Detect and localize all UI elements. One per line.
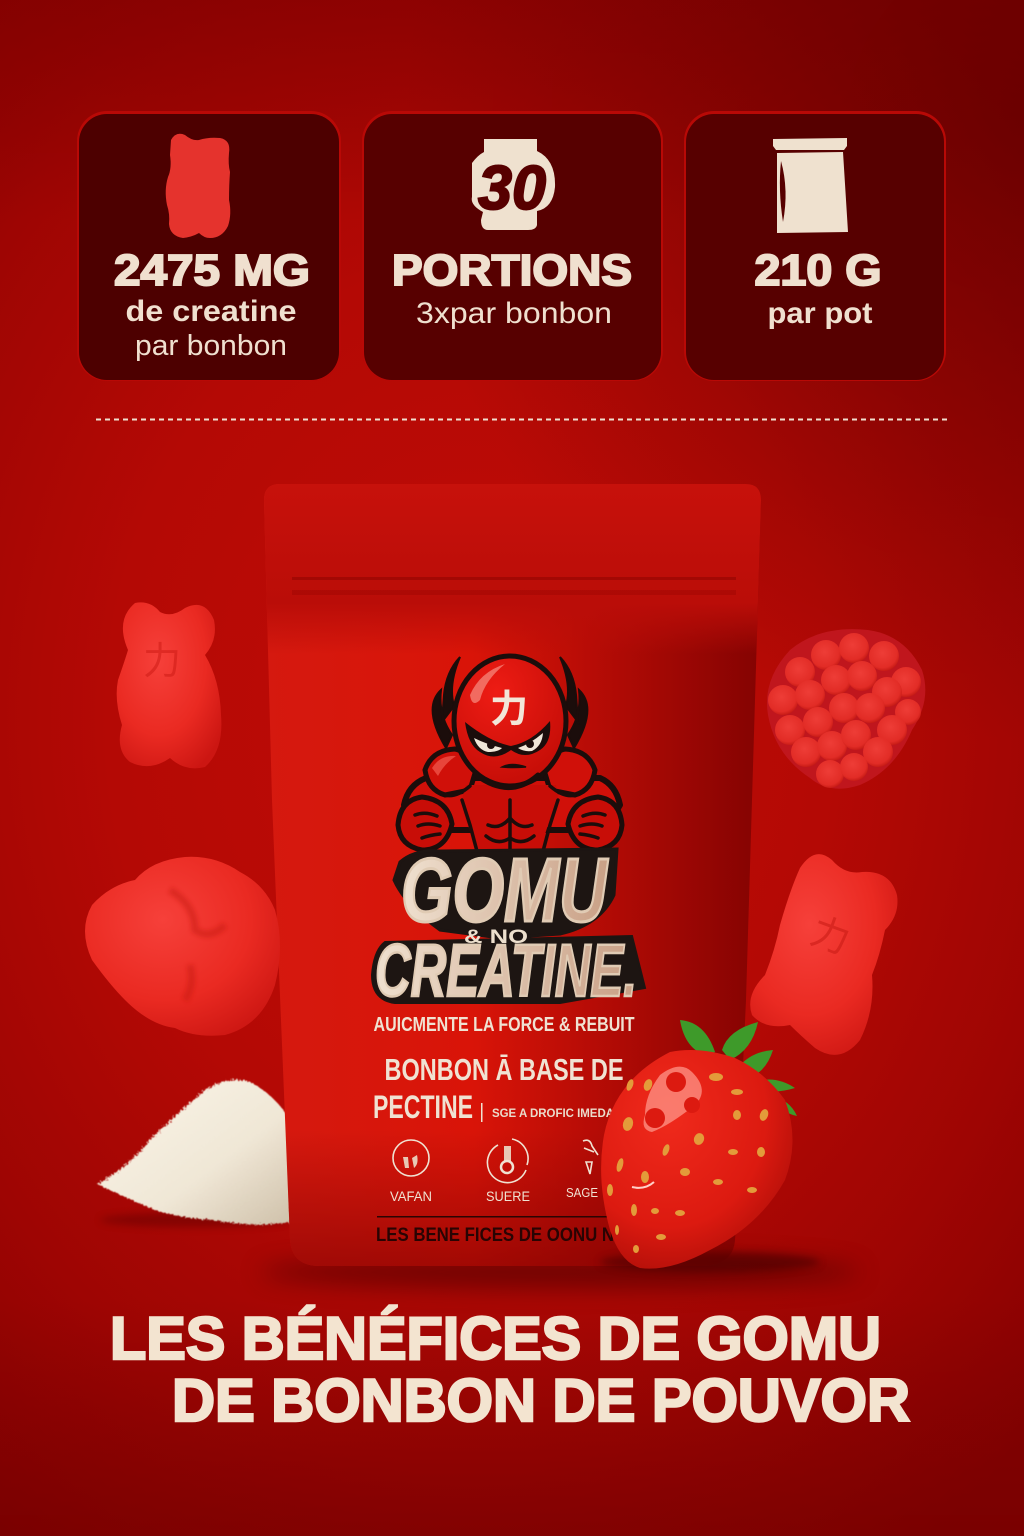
torso (462, 785, 558, 856)
panel: creatine dose (77, 111, 341, 381)
icon: jar with 30 (472, 139, 555, 230)
mascot (398, 656, 622, 856)
strawberry (600, 1020, 820, 1272)
kanji: 力 (490, 689, 528, 731)
title (110, 1305, 910, 1434)
gummy bear right (750, 854, 898, 1055)
upper arms (404, 778, 620, 830)
gummy bear left: 力 (143, 641, 181, 683)
stat label: 3xpar bonbon (416, 297, 612, 330)
pouch badge: sage: SAGE (566, 1185, 598, 1200)
logo GOMU (372, 841, 645, 1012)
shoulders (425, 749, 595, 795)
title: DE BONBON DE POUVOR (172, 1367, 910, 1434)
raspberry (767, 629, 925, 789)
stat label: par pot (768, 297, 872, 330)
gummy bear right: 力 (805, 910, 855, 963)
stat value: PORTIONS (392, 246, 632, 295)
pectin powder pile (97, 1080, 290, 1227)
logo GOMU: GOMU (401, 841, 608, 941)
pouch badge: sugar (486, 1139, 530, 1204)
stat value: 210 G (754, 246, 882, 295)
logo GOMU: & NO (464, 927, 528, 948)
pouch footer text: LES BENE FICES DE OONU N (376, 1225, 614, 1246)
panel: portions (362, 111, 663, 381)
pouch badge: sage (566, 1140, 598, 1200)
pouch badge: vegan (390, 1140, 432, 1204)
pouch heading: BONBON Ā BASE DE (384, 1052, 624, 1087)
pouch heading (373, 1052, 624, 1125)
pouch badge: vegan: VAFAN (390, 1188, 432, 1204)
icon: gummy bear (166, 134, 230, 238)
leaves (680, 1020, 797, 1116)
stat label: de creatine (126, 295, 296, 328)
logo GOMU: CREATINE. (375, 929, 637, 1012)
ground shadow (260, 1256, 860, 1288)
gummy blob left (85, 857, 280, 1036)
icon: pouch (773, 138, 848, 233)
head (454, 656, 566, 786)
stat value: 2475 MG (114, 246, 310, 295)
mask (465, 721, 550, 757)
pouch tagline: AUICMENTE LA FORCE & REBUIT (374, 1014, 634, 1036)
gummy bear left (117, 602, 221, 768)
pouch heading: SGE A DROFIC IMEDA (492, 1106, 614, 1120)
fists (398, 797, 622, 850)
stat sublabel: par bonbon (135, 330, 287, 362)
pouch heading: PECTINE (373, 1089, 473, 1125)
pouch badge: sugar: SUERE (486, 1188, 530, 1204)
icon: jar with 30: 30 (478, 154, 546, 223)
product pouch (260, 484, 770, 1270)
title: LES BÉNÉFICES DE GOMU (110, 1305, 881, 1372)
horns (433, 657, 587, 748)
panel: net weight (684, 111, 946, 381)
